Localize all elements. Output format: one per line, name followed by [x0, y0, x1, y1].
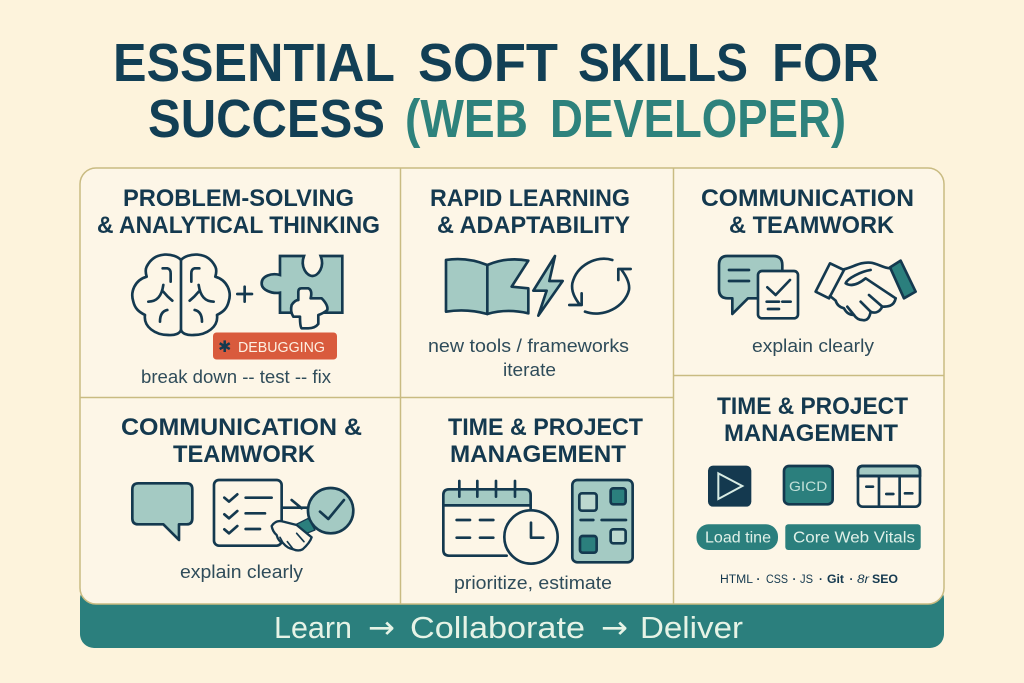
heading: communication: COMMUNICATION &: [121, 414, 362, 441]
heading: rapid learning: RAPID LEARNING: [430, 185, 630, 212]
title: [113, 33, 879, 149]
icon: book, bolt and cycle: [446, 256, 631, 316]
badge: debugging: [213, 332, 337, 360]
heading: problem-solving: PROBLEM-SOLVING: [123, 185, 354, 212]
tech list: CSS: [766, 574, 788, 586]
caption: new tools: new tools / frameworks: [428, 336, 629, 356]
heading: time and project: [448, 414, 643, 468]
tech list: ·: [819, 574, 823, 586]
icons: play, CI/CD and layout: GICD: [789, 478, 827, 494]
title: ESSENTIAL: [113, 33, 395, 93]
footer banner: Deliver: [640, 610, 743, 645]
title: DEVELOPER): [550, 89, 846, 149]
panel: time and project middle: [401, 398, 673, 603]
panel: time and project right: [674, 377, 943, 603]
heading: communication: & TEAMWORK: [729, 212, 895, 239]
heading: rapid learning: [430, 185, 630, 239]
heading: time and project: MANAGEMENT: [724, 420, 898, 447]
title: SUCCESS: [148, 89, 385, 149]
heading: time and project: MANAGEMENT: [450, 441, 626, 468]
panel: problem-solving: [81, 169, 400, 397]
caption: new tools: [428, 336, 629, 380]
title: SKILLS: [578, 33, 748, 93]
icon: calendar, clock and board: [443, 480, 633, 564]
title: SOFT: [418, 33, 558, 93]
heading: time and project: TIME & PROJECT: [717, 393, 908, 420]
tech list: 8r: [857, 574, 870, 586]
heading: problem-solving: [97, 185, 380, 239]
pill: core web vitals: Core Web Vitals: [793, 530, 915, 547]
badge: debugging: ✱: [218, 337, 231, 356]
panel: communication bottom: [81, 398, 400, 603]
tech list: ·: [756, 574, 760, 586]
tech list: SEO: [872, 574, 898, 586]
caption: explain clearly: explain clearly: [180, 562, 303, 582]
heading: time and project: TIME & PROJECT: [448, 414, 643, 441]
panel frame: [80, 168, 944, 604]
tech list: ·: [850, 574, 853, 586]
heading: communication: [701, 185, 914, 239]
footer banner: Learn: [274, 610, 352, 645]
panel dividers: [80, 168, 944, 604]
heading: communication: COMMUNICATION: [701, 185, 914, 212]
heading: problem-solving: & ANALYTICAL THINKING: [97, 212, 380, 239]
caption: break down: break down -- test -- fix: [141, 367, 331, 387]
title: FOR: [772, 33, 879, 93]
heading: communication: TEAMWORK: [173, 441, 316, 468]
caption: prioritize: prioritize, estimate: [454, 573, 612, 593]
icon: bubble, checklist and handshake: [132, 480, 353, 550]
caption: new tools: iterate: [503, 360, 556, 380]
caption: explain clearly: explain clearly: [752, 336, 874, 356]
icon: brain plus puzzle: [132, 255, 342, 335]
pill: load time: Load tine: [705, 530, 771, 547]
footer banner: Collaborate: [410, 610, 585, 645]
pill: core web vitals: [785, 524, 921, 550]
icons: play, CI/CD and layout: [708, 466, 920, 507]
tech list: HTML: [720, 574, 754, 586]
heading: communication: [121, 414, 362, 468]
heading: rapid learning: & ADAPTABILITY: [437, 212, 630, 239]
pill: load time: [696, 524, 778, 550]
panel: communication top: [674, 169, 943, 376]
icon: chat and handshake: [719, 256, 916, 320]
tech list: JS: [800, 574, 813, 586]
title: (WEB: [405, 89, 528, 149]
footer banner: →: [601, 610, 628, 646]
panel: rapid learning: [401, 169, 673, 397]
footer banner: [80, 585, 944, 648]
tech list: [720, 574, 898, 586]
tech list: ·: [792, 574, 796, 586]
footer banner: →: [368, 610, 395, 646]
badge: debugging: DEBUGGING: [238, 339, 325, 356]
tech list: Git: [827, 574, 844, 586]
heading: time and project: [717, 393, 908, 447]
